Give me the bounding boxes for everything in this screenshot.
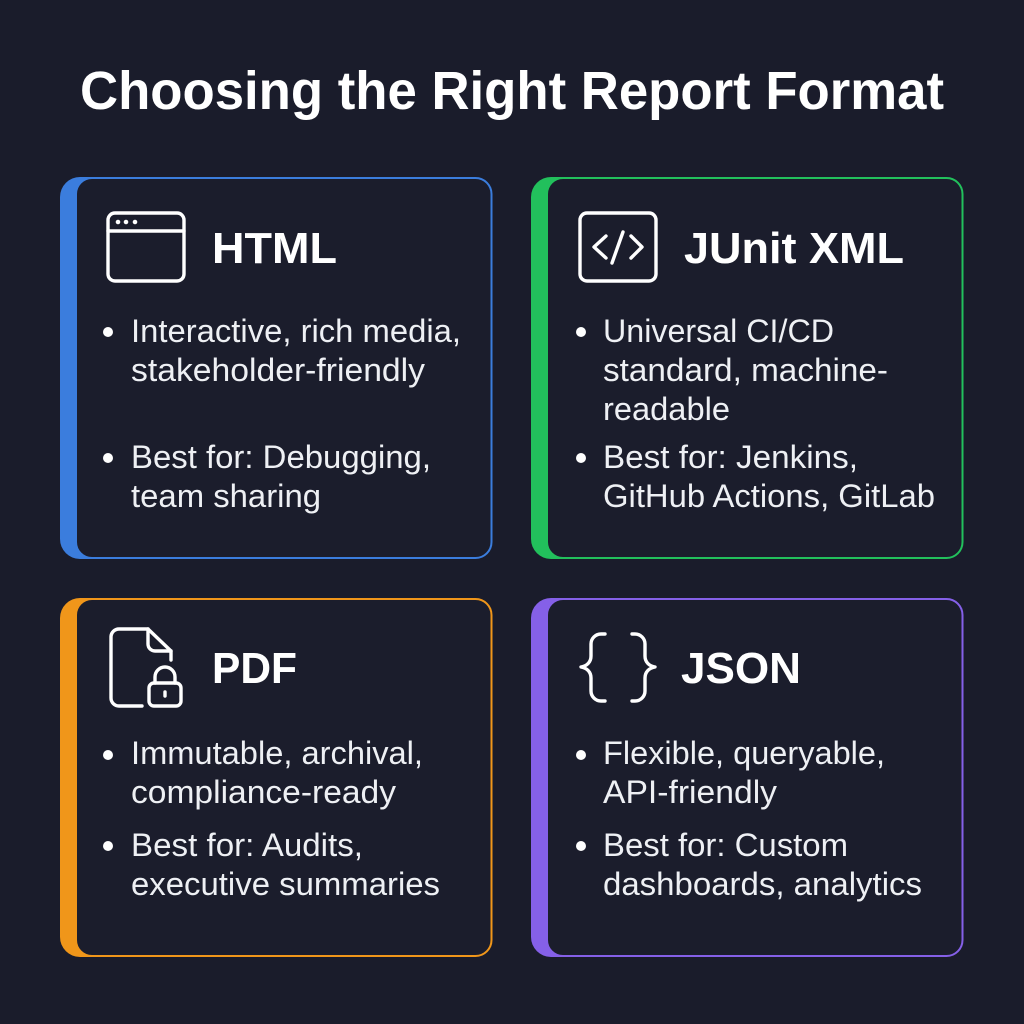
bullet list: JSON: dashboards, analytics [603,866,922,902]
bullet list: PDF: Immutable, archival, [131,735,423,771]
bullet list: HTML: Interactive, rich media, [131,313,461,349]
icon: browser window [108,213,184,281]
bullet list: JUnit XML: standard, machine- [603,352,888,388]
card body: JUnit XML [547,178,962,558]
bullet list: PDF: compliance-ready [131,774,396,810]
bullet list: PDF [103,735,440,902]
bullet list: JSON: Best for: Custom [603,827,848,863]
bullet list: JUnit XML: Best for: Jenkins, [603,439,858,475]
bullet list: JSON [576,735,922,902]
icon: locked document [111,629,181,706]
panel: JUnit XML [531,177,962,559]
heading: JSON: JSON [681,644,801,693]
panel: PDF [60,598,492,957]
heading: HTML: HTML [212,224,337,273]
bullet list: PDF: executive summaries [131,866,440,902]
heading: JUnit XML: JUnit XML [684,224,904,273]
bullet list: PDF: Best for: Audits, [131,827,363,863]
card body: HTML [76,178,492,558]
bullet list: JSON: Flexible, queryable, [603,735,885,771]
icon: curly braces [581,634,655,701]
card accent: orange [60,598,120,957]
card accent: green [531,177,591,559]
bullet list: HTML: Best for: Debugging, [131,439,431,475]
bullet list: JUnit XML [576,313,935,514]
card body: JSON [547,599,962,956]
bullet list: JUnit XML: GitHub Actions, GitLab [603,478,935,514]
bullet list: HTML: team sharing [131,478,321,514]
bullet list: JUnit XML: readable [603,391,730,427]
panel: HTML [60,177,492,559]
bullet list: HTML [103,313,461,514]
panel: JSON [531,598,962,957]
icon: code brackets [580,213,656,281]
card body: PDF [76,599,492,956]
bullet list: HTML: stakeholder-friendly [131,352,425,388]
heading: PDF: PDF [212,644,297,693]
title: Choosing the Right Report Format [80,61,944,121]
bullet list: JSON: API-friendly [603,774,777,810]
card accent: blue [60,177,120,559]
bullet list: JUnit XML: Universal CI/CD [603,313,834,349]
card accent: purple [531,598,591,957]
